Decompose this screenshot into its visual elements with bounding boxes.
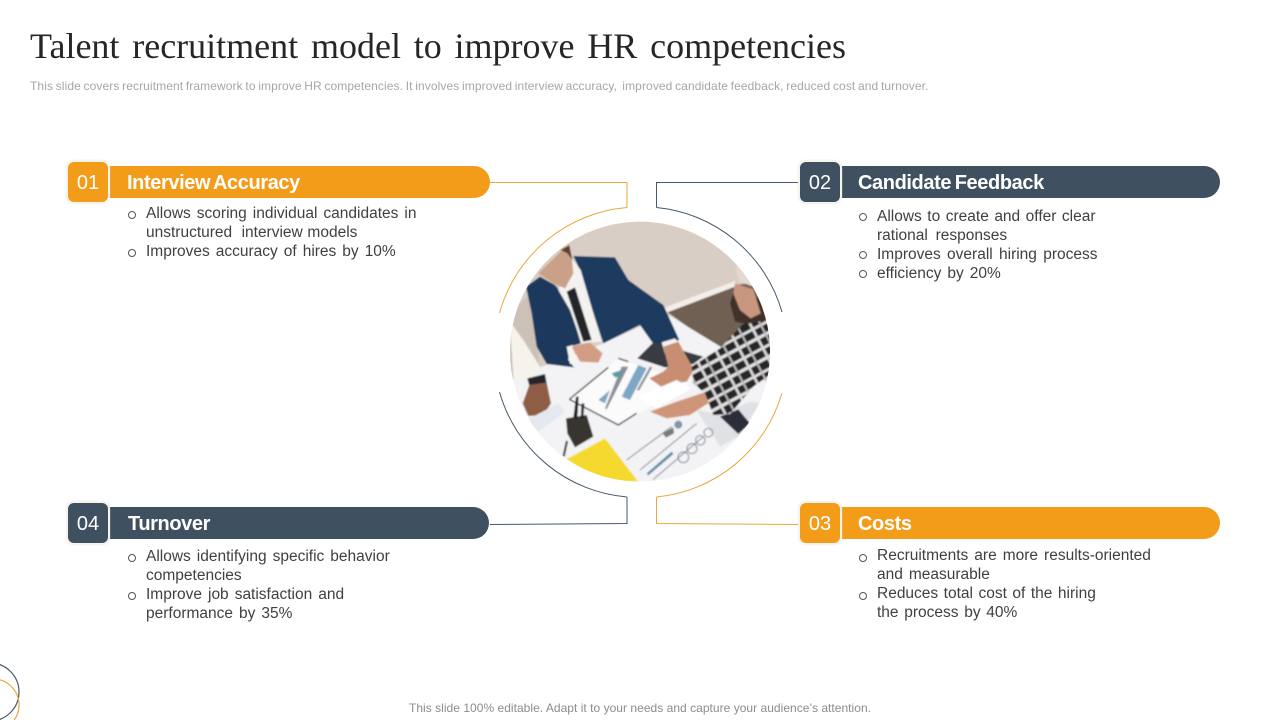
bullet list 01: unstructured interview models — [146, 224, 357, 241]
connector: 01 to arc — [490, 182, 627, 313]
bullet list 01: Improves accuracy of hires by 10% — [146, 243, 396, 260]
number badge 04 — [66, 501, 110, 545]
header bar 04 — [108, 507, 489, 539]
number badge 02 — [798, 160, 842, 204]
bullet list 03: Recruitments are more results-oriented — [877, 547, 1151, 564]
bullet list 04: performance by 35% — [146, 605, 292, 622]
header bar 03: Costs — [858, 513, 912, 535]
bullet list 03: the process by 40% — [877, 604, 1017, 621]
header bar 02 — [839, 166, 1220, 198]
connector: 03 to arc — [656, 393, 798, 524]
panel: 03 Costs — [798, 500, 1220, 621]
panel: 02 Candidate Feedback — [798, 160, 1220, 282]
connector: 02 to arc — [656, 182, 798, 312]
bullet list 04: competencies — [146, 567, 242, 584]
bullet list 03: and measurable — [877, 566, 990, 583]
central diagram: photo, arcs and connectors — [0, 182, 798, 720]
number badge 02: 02 — [809, 172, 831, 194]
bullet list 01: Allows scoring individual candidates in — [146, 205, 416, 222]
header bar 01: Interview Accuracy — [127, 172, 300, 194]
connector: 04 to arc — [490, 392, 627, 524]
bullet list 02: Improves overall hiring process — [877, 246, 1098, 263]
photo: business meeting around a table — [503, 217, 777, 487]
bullet list 02: Allows to create and offer clear — [877, 208, 1096, 225]
decorative corner circles — [0, 663, 19, 720]
footer note: This slide 100% editable. Adapt it to your needs and capture your audience’s attention. — [409, 701, 871, 715]
bullet list 01 — [128, 205, 416, 260]
bullet list 02: efficiency by 20% — [877, 265, 1001, 282]
title: Talent recruitment model to improve HR competencies — [30, 26, 846, 66]
number badge 03: 03 — [809, 513, 831, 535]
subtitle: This slide covers recruitment framework to improve HR competencies. It involves improved interview accuracy, improved candidate feedback, reduced cost and turnover. — [30, 79, 929, 93]
number badge 01: 01 — [77, 172, 99, 194]
header bar 03 — [839, 507, 1220, 539]
bullet list 04: Improve job satisfaction and — [146, 586, 344, 603]
bullet list 03 — [859, 547, 1151, 621]
panel: 01 Interview Accuracy — [66, 160, 490, 260]
bullet list 03: Reduces total cost of the hiring — [877, 585, 1096, 602]
number badge 03 — [798, 501, 842, 545]
number badge 01 — [66, 160, 110, 204]
bullet list 04 — [128, 548, 390, 622]
bullet list 02: rational responses — [877, 227, 1007, 244]
panel: 04 Turnover — [66, 500, 489, 622]
header bar 02: Candidate Feedback — [858, 172, 1044, 194]
header bar 01 — [108, 166, 490, 198]
header bar 04: Turnover — [128, 513, 210, 535]
bullet list 02 — [859, 208, 1098, 282]
bullet list 04: Allows identifying specific behavior — [146, 548, 390, 565]
number badge 04: 04 — [77, 513, 99, 535]
